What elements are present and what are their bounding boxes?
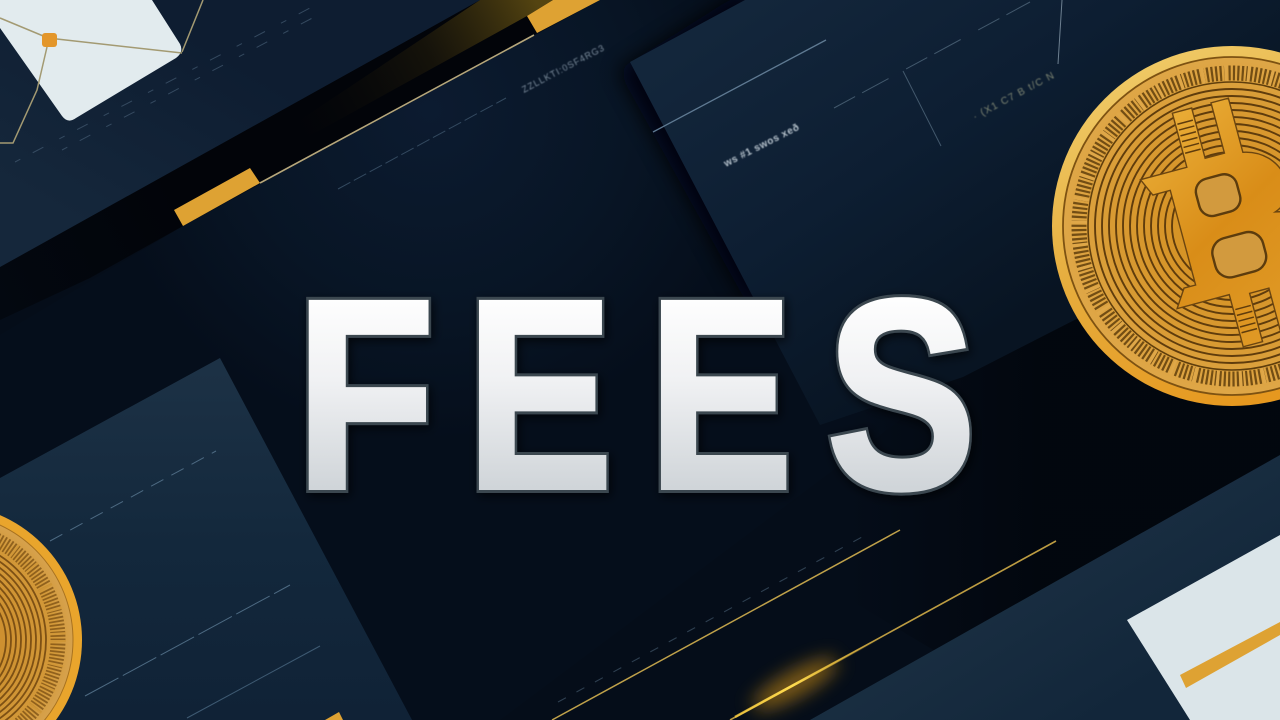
panel: bottom-right card (810, 455, 1280, 720)
dashed lines: top-left card (15, 8, 320, 162)
gold tab: bottom-left card (325, 712, 343, 720)
dashed line and caption: centre band: ZZLLKTI:0SF4RG3 (520, 42, 607, 95)
title fill layer: S (827, 245, 976, 545)
envelope card (0, 0, 203, 143)
coin lettering ring (1079, 73, 1280, 379)
panel: top-left card (0, 0, 480, 267)
panel: top-right card (630, 0, 1280, 425)
bitcoin prong hatching (1177, 118, 1257, 335)
lines and captions: top-right card: · (X1 C7 B t/C N (971, 70, 1057, 123)
panel: centre navy band (0, 0, 900, 720)
gold rule with tabs (174, 0, 600, 226)
title fill layer: F (296, 244, 435, 545)
title fill layer: E (648, 244, 793, 545)
dashed line and caption: centre band (338, 42, 607, 189)
coin concentric engraving (1095, 89, 1280, 363)
shadow: behind top-right panel (618, 0, 790, 300)
title fill layer (296, 244, 976, 546)
shadow: beneath top-right panel (850, 210, 1280, 660)
title outline layer (296, 244, 976, 546)
panel: dark strip behind gold rule (0, 0, 600, 320)
coin: bitcoin top-right (1052, 46, 1280, 406)
coin: bottom-left (0, 504, 82, 720)
title outline layer: E (466, 245, 613, 546)
white card with gold bar (1127, 535, 1280, 720)
lines: bottom-left card (50, 451, 320, 718)
bitcoin upper counter (1193, 171, 1243, 219)
bitcoin lower counter (1209, 229, 1270, 281)
title outline layer: F (296, 244, 435, 545)
title outline layer: E (648, 244, 793, 545)
coin bitcoin symbol (1126, 85, 1280, 361)
lines and captions: top-right card (653, 0, 1062, 170)
gold accent lines (552, 530, 1056, 720)
title outline layer: S (827, 245, 976, 545)
panel: bottom-left card (0, 358, 412, 720)
title fill layer: E (466, 245, 613, 546)
lines and captions: top-right card: ws #1 swos xeð (721, 121, 802, 170)
title: FEES (296, 244, 976, 546)
glow: gold haze in strip (270, 0, 553, 158)
